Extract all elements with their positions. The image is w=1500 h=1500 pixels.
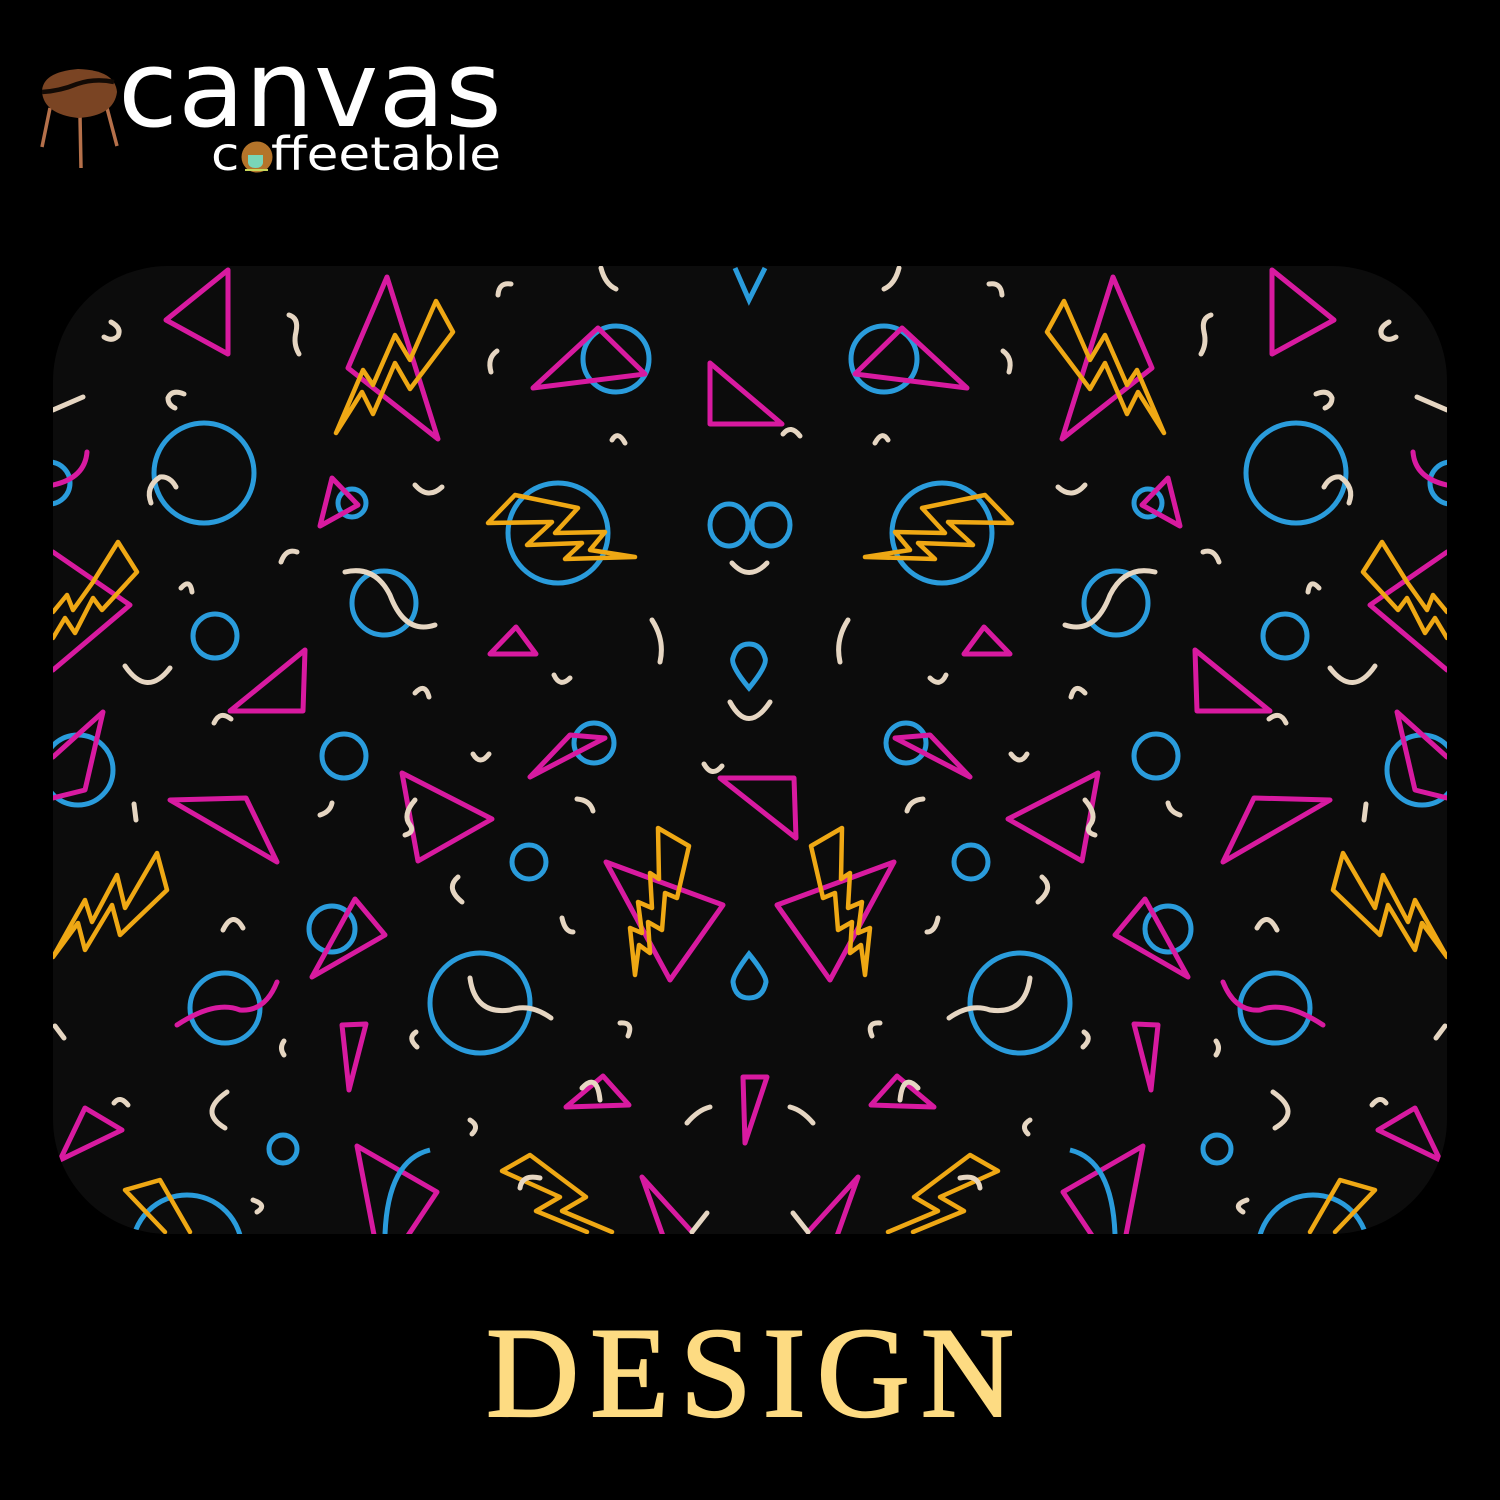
orange lightning bolts <box>53 301 689 1232</box>
icon: coffee cup <box>242 142 272 172</box>
heading: DESIGN: DESIGN <box>486 1301 1014 1444</box>
panel: placemat with neon pattern <box>53 266 1447 1234</box>
magenta triangles <box>53 270 723 1240</box>
blue circles <box>28 326 748 1305</box>
left half of neon pattern <box>28 268 748 1305</box>
logo wordmark: canvas: canvas <box>118 28 502 151</box>
cream squiggles <box>53 268 710 1232</box>
logo: canvas coffeetable <box>42 28 502 181</box>
central neon shapes <box>704 268 800 1143</box>
icon: coffee bean table <box>42 69 117 168</box>
mirrored right half of neon pattern <box>752 268 1472 1305</box>
blue curve over triangle <box>385 1150 430 1234</box>
logo wordmark: coffeetable: coffeetable <box>211 127 501 181</box>
